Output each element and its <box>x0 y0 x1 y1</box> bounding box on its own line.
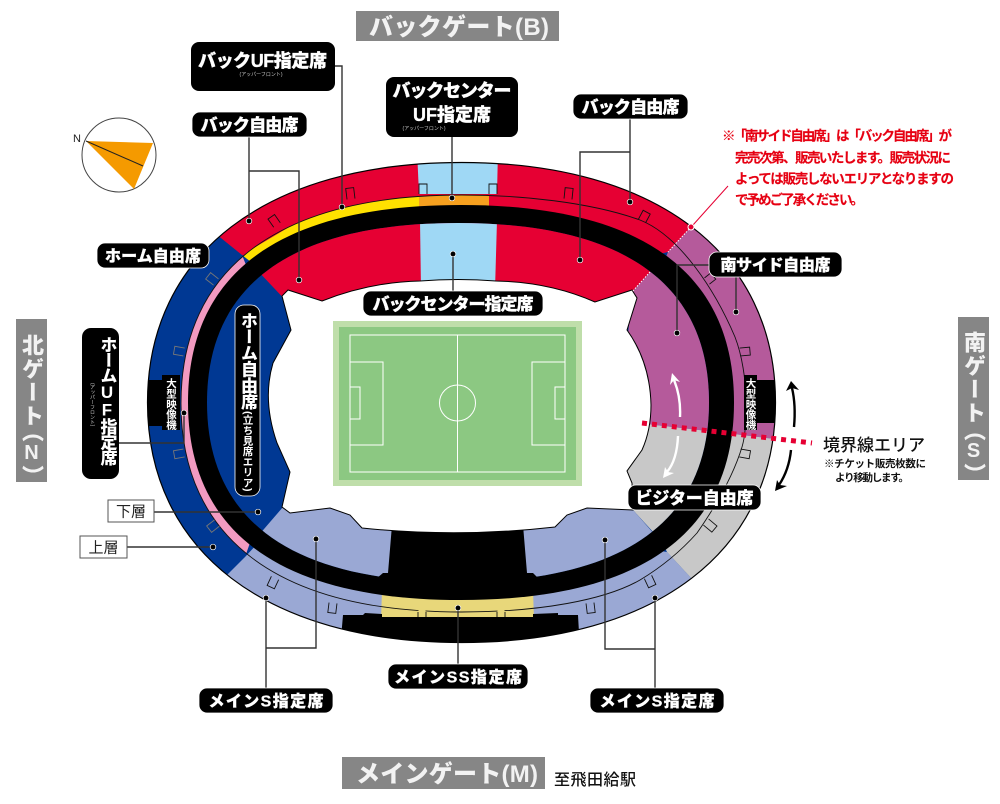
label: home free <box>97 243 209 268</box>
label: lower tier: 下層 <box>116 504 146 520</box>
arrow: white up <box>670 373 680 417</box>
red note <box>722 128 954 208</box>
label: upper tier: 上層 <box>88 540 119 556</box>
label: back center UF reserved: バックセンター <box>392 81 512 101</box>
red note: ※「南サイド自由席」は「バック自由席」が <box>722 128 952 144</box>
label: home free standing <box>235 305 260 496</box>
label: back UF reserved: バックUF指定席 <box>198 50 327 71</box>
boundary area text: ※チケット販売枚数に <box>824 457 926 470</box>
arrow: white down <box>663 436 678 478</box>
gate: south: S <box>962 440 984 462</box>
gate: south <box>958 317 989 485</box>
label: back UF reserved <box>191 42 335 91</box>
upper tier seating <box>148 163 775 642</box>
label: back free left <box>192 112 307 137</box>
label: visitor free <box>628 485 761 510</box>
label: back center reserved <box>363 291 543 316</box>
central black block <box>372 525 543 592</box>
big screen left <box>162 375 180 430</box>
white dotted seat boundaries <box>632 227 691 292</box>
label: back free right: バック自由席 <box>582 97 680 117</box>
label: home UF reserved: ホームUF指定席 <box>98 336 117 467</box>
central hole around the pitch <box>268 280 651 533</box>
compass: N <box>73 133 81 145</box>
station direction text: 至飛田給駅 <box>554 771 636 789</box>
boundary area text: より移動します。 <box>835 471 909 484</box>
label: back center UF reserved: UF指定席 <box>413 104 491 125</box>
boundary dotted line <box>642 423 812 443</box>
label: back center UF reserved <box>386 77 518 137</box>
concourse black ring <box>188 205 734 600</box>
main SS inner detail <box>418 609 505 617</box>
gate: north: N <box>20 442 42 464</box>
stadium outer outline <box>148 162 776 642</box>
big screen right: 大型映像機 <box>744 377 756 430</box>
red note: よっては販売しないエリアとなりますの <box>735 170 954 186</box>
gate: south: 南ゲート <box>961 331 986 425</box>
yellow strip back UF seats <box>244 196 419 261</box>
upper tier inner line <box>181 195 746 612</box>
label: home free standing: (立ち見席エリア) <box>242 411 254 492</box>
label: lower tier <box>108 500 154 522</box>
lower tier seating <box>207 223 709 577</box>
arrow: black down <box>775 450 791 491</box>
leader dots <box>181 195 739 611</box>
label: main S reserved right <box>590 688 724 713</box>
label: back free left: バック自由席 <box>200 115 298 135</box>
label: home UF reserved <box>82 328 119 479</box>
label: main SS reserved <box>388 664 528 689</box>
red note: 完売次第、販売いたします。販売状況に <box>735 150 951 166</box>
red note pointer <box>688 186 728 230</box>
gate: north <box>16 319 47 487</box>
gate: north: 北ゲート <box>19 334 44 428</box>
label: visitor free: ビジター自由席 <box>636 488 754 508</box>
arrow: black up <box>786 381 799 427</box>
gate: south: （ <box>961 419 986 441</box>
stadium seating map <box>146 162 776 644</box>
gate: back: バックゲート(B) <box>369 13 549 41</box>
gate: north: （ <box>19 420 44 442</box>
label: home free: ホーム自由席 <box>105 246 201 266</box>
label: back center UF reserved: (アッパーフロント) <box>402 126 446 132</box>
label: main S reserved right: メインS指定席 <box>600 692 714 710</box>
orange strip back center UF seats <box>419 196 489 206</box>
label: south side free: 南サイド自由席 <box>720 256 830 274</box>
label: main SS reserved: メインSS指定席 <box>394 668 522 686</box>
label: back free right <box>573 94 688 119</box>
label: back UF reserved: (アッパーフロント) <box>239 72 283 78</box>
label: back center reserved: バックセンター指定席 <box>372 294 534 314</box>
big screen left: 大型映像機 <box>165 377 177 430</box>
gate: main: メインゲート(M) <box>356 760 538 788</box>
label: main S reserved left: メインS指定席 <box>208 692 324 710</box>
label: main S reserved left <box>199 688 333 713</box>
label: home free standing: ホーム自由席 <box>238 312 258 411</box>
leader lines <box>119 66 736 688</box>
label: upper tier <box>80 536 127 558</box>
compass <box>73 118 156 192</box>
pink strip home UF seats <box>181 257 250 553</box>
gate: south: ） <box>961 463 986 485</box>
entrance notches <box>173 184 751 613</box>
gate: north: ） <box>19 465 44 487</box>
label: home UF reserved: (アッパーフロント) <box>89 383 95 427</box>
pitch <box>333 321 582 486</box>
boundary area text: 境界線エリア <box>823 436 925 455</box>
boundary area text <box>823 436 926 484</box>
red note: で予めご了承ください。 <box>735 192 864 208</box>
label: south side free <box>709 252 842 277</box>
